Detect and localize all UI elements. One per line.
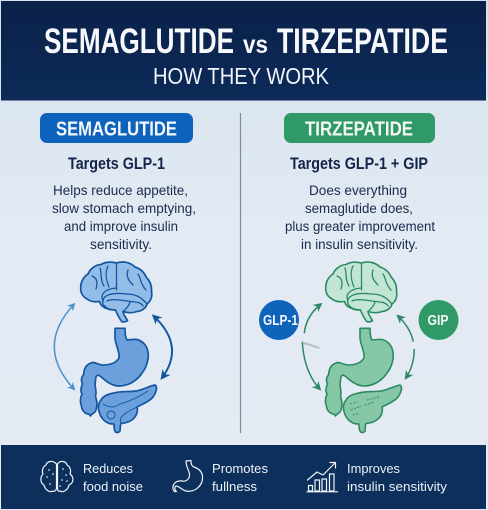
center divider [240,113,242,433]
tirzepatide description: in insulin sensitivity. [301,237,418,252]
icon: outline stomach [173,460,203,492]
tirzepatide description: plus greater improvement [285,219,435,234]
GLP-1 badge [259,300,299,340]
arrow: upper left green [304,304,321,333]
text: improves insulin sensitivity: Improves [347,462,400,476]
arrow: lower left green [302,342,320,389]
arrow: light blue loop [54,304,74,389]
tirzepatide description: Does everything [309,183,407,198]
icon: growth chart [307,462,338,492]
footer item: improves insulin sensitivity [307,462,448,494]
tirzepatide description: semaglutide does, [305,201,413,216]
semaglutide pill: SEMAGLUTIDE [56,118,177,140]
text: promotes fullness: Promotes [212,462,268,476]
icon: stomach and intestine [325,328,393,416]
semaglutide description: slow stomach emptying, [52,201,196,216]
icon: brain [81,262,152,322]
GIP badge [418,300,458,340]
organ diagram: blue [80,262,156,433]
icon: pancreas [344,385,401,433]
text: reduces food noise: Reduces [83,462,133,476]
icon: brain [326,262,397,322]
tirzepatide target heading: Targets GLP-1 + GIP [290,155,428,173]
smudge mark [302,341,320,349]
title: SEMAGLUTIDE [44,22,234,61]
organ diagram: green [325,262,401,433]
header banner [1,1,486,100]
semaglutide pill [40,113,193,143]
footer item: promotes fullness [173,460,268,494]
GLP-1 badge: GLP-1 [263,313,298,329]
arrow: dark blue loop [153,316,172,378]
footer item: reduces food noise [41,461,143,494]
icon: stomach and intestine [80,328,148,416]
panel: semaglutide [40,113,196,433]
semaglutide description: and improve insulin [64,219,178,234]
tirzepatide pill [284,113,435,143]
tirzepatide pill: TIRZEPATIDE [305,118,413,140]
footer banner [1,445,486,509]
tirzepatide description [285,183,435,252]
GIP badge: GIP [428,313,449,329]
icon: pancreas [99,385,156,433]
panel: tirzepatide [259,113,458,433]
semaglutide description: Helps reduce appetite, [53,183,188,198]
text: reduces food noise: food noise [83,480,143,494]
semaglutide description: sensitivity. [90,237,152,252]
subtitle: HOW THEY WORK [153,63,330,89]
text: promotes fullness: fullness [212,480,257,494]
text: improves insulin sensitivity: insulin sensitivity [347,480,448,494]
arrow: upper right green [398,316,413,342]
semaglutide description [52,183,196,252]
arrow: lower right green [406,349,414,378]
icon: outline brain [41,461,73,492]
title: vs [243,31,268,59]
semaglutide target heading: Targets GLP-1 [68,155,165,173]
